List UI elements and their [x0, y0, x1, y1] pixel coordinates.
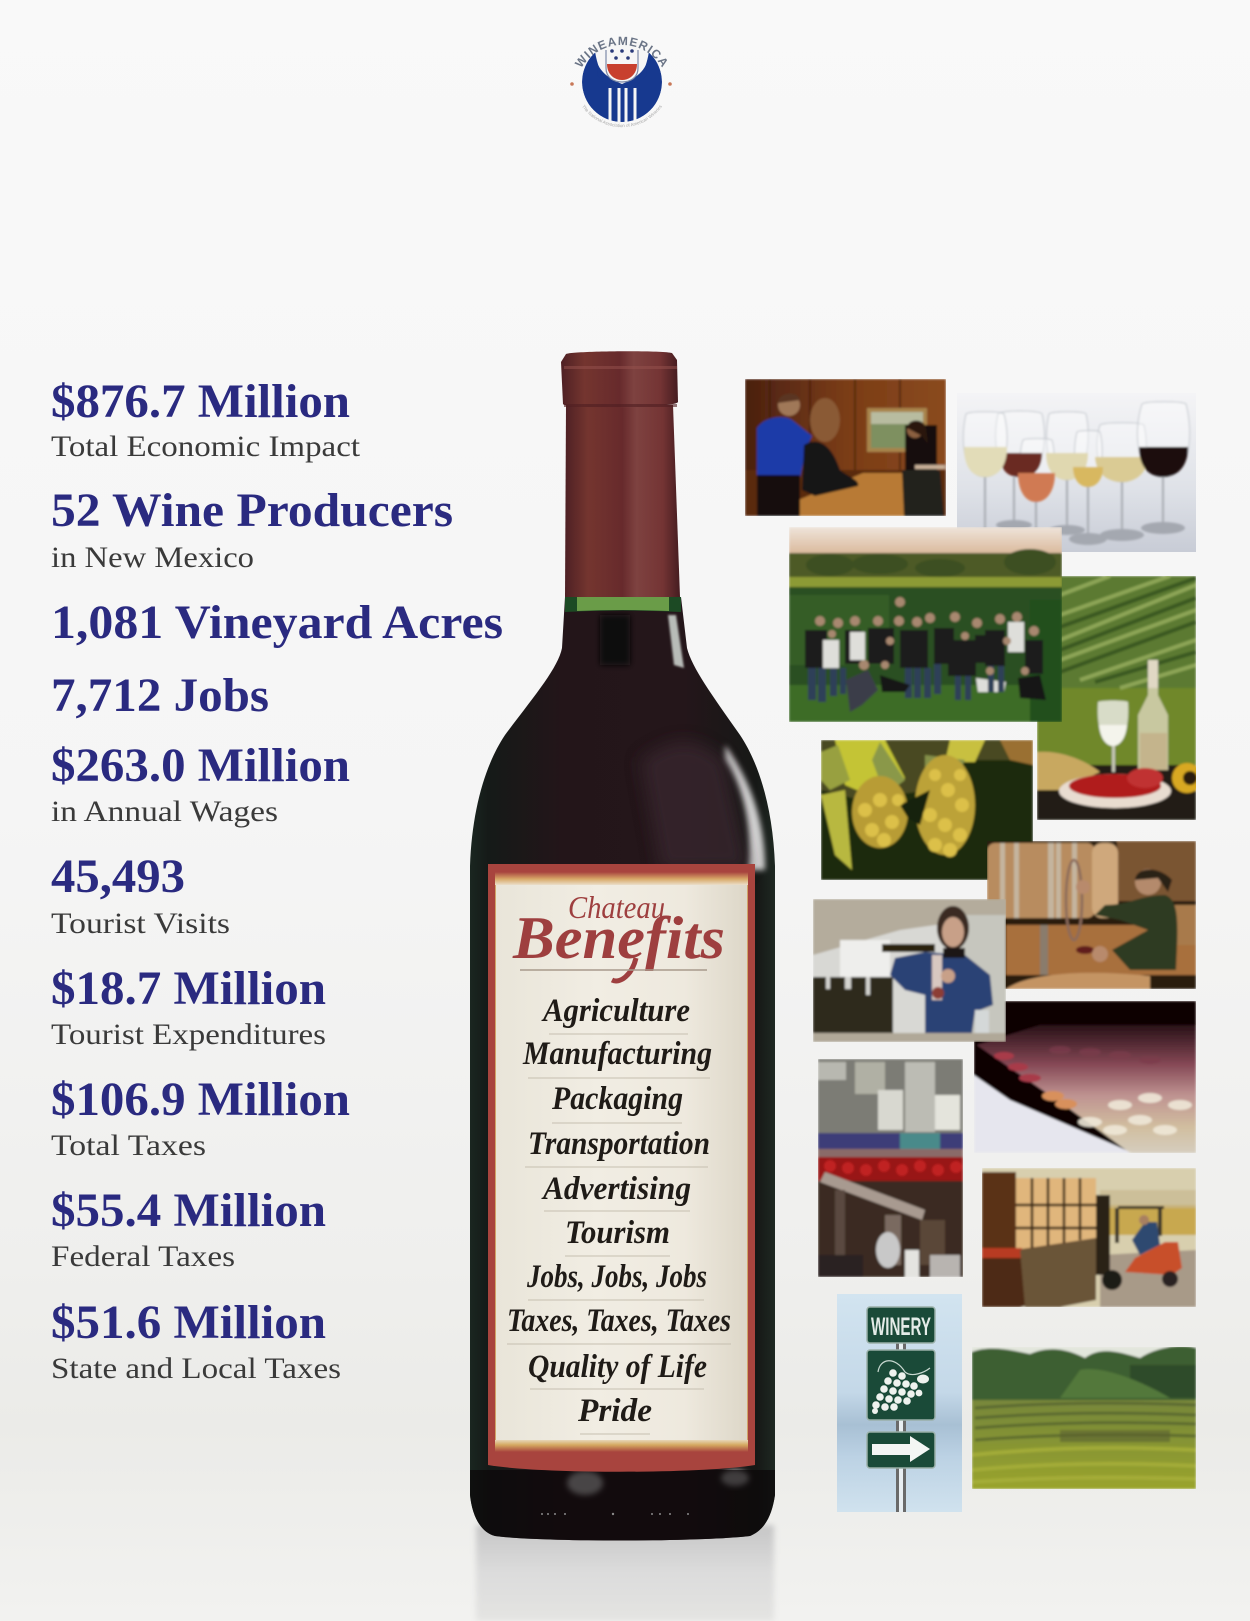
label title: Chateau Benefits: Chateau — [568, 889, 665, 925]
label list of benefits: Transportation — [528, 1126, 710, 1162]
photo: vineyard rows and tree line — [972, 1346, 1196, 1489]
people — [805, 597, 1046, 712]
photo: wine glasses on tasting table — [974, 1001, 1196, 1153]
photo: bottling line — [818, 1059, 963, 1277]
burgundy foil capsule — [561, 351, 680, 597]
bottle label — [488, 864, 755, 1472]
photo: golden grape cluster — [821, 740, 1033, 880]
photo: woman pouring wine — [813, 899, 1006, 1042]
label list of benefits — [507, 993, 731, 1434]
sign: direction arrow — [867, 1432, 935, 1468]
stat: annual wages: in Annual Wages — [51, 795, 278, 828]
label list of benefits: Taxes, Taxes, Taxes — [507, 1303, 731, 1339]
wine bottle — [470, 351, 775, 1545]
sign: grape cluster — [867, 1350, 935, 1420]
photo: row of wine glasses — [957, 393, 1196, 552]
stat: federal taxes: $55.4 Million — [51, 1184, 326, 1237]
stat list — [51, 375, 503, 1385]
label list of benefits: Jobs, Jobs, Jobs — [526, 1259, 707, 1295]
stat: tourist visits: 45,493 — [51, 850, 185, 903]
photo: forklift and grape bins — [982, 1168, 1196, 1307]
label list of benefits: Pride — [577, 1393, 652, 1429]
stat: wine producers — [51, 484, 453, 574]
bottle glass body — [470, 597, 775, 1545]
logo: WineAmerica seal: WINEAMERICA — [574, 36, 667, 68]
photo: winemaker among oak barrels — [987, 841, 1196, 989]
stat: tourist expenditures: $18.7 Million — [51, 962, 326, 1015]
photo: winery family group in vineyard — [789, 527, 1062, 722]
stat: state and local taxes: State and Local Taxes — [51, 1352, 341, 1385]
logo: WineAmerica seal — [570, 36, 672, 128]
stat: total taxes — [51, 1073, 350, 1162]
stat: state and local taxes: $51.6 Million — [51, 1296, 326, 1349]
stat: total economic impact — [51, 375, 361, 463]
stat: tourist expenditures: Tourist Expenditures — [51, 1018, 326, 1051]
stat: tourist visits: Tourist Visits — [51, 907, 230, 940]
stat: federal taxes: Federal Taxes — [51, 1240, 235, 1273]
label title: Chateau Benefits: Benefits — [512, 905, 725, 971]
label list of benefits: Packaging — [551, 1081, 683, 1117]
sign pole — [896, 1340, 906, 1512]
label list of benefits: Agriculture — [541, 993, 690, 1029]
label list of benefits: Advertising — [541, 1171, 691, 1207]
label title: Chateau Benefits — [512, 889, 725, 981]
stat: state and local taxes — [51, 1296, 341, 1385]
stat: jobs: 7,712 Jobs — [51, 669, 269, 722]
sign: WINERY — [867, 1307, 935, 1343]
stat: tourist expenditures — [51, 962, 326, 1051]
stat: total economic impact: $876.7 Million — [51, 375, 350, 428]
sign: WINERY: WINERY — [871, 1313, 931, 1341]
photo: winery road sign — [837, 1294, 962, 1512]
label list of benefits: Manufacturing — [522, 1036, 712, 1072]
stat: wine producers: 52 Wine Producers — [51, 484, 453, 537]
stat: total economic impact: Total Economic Impact — [51, 430, 361, 463]
label list of benefits: Quality of Life — [528, 1349, 707, 1385]
stat: total taxes: Total Taxes — [51, 1129, 206, 1162]
stat: annual wages: $263.0 Million — [51, 739, 350, 792]
stat: total taxes: $106.9 Million — [51, 1073, 350, 1126]
photo collage — [745, 379, 1202, 1512]
stat: tourist visits — [51, 850, 230, 940]
stat: federal taxes — [51, 1184, 326, 1273]
stat: vineyard acres: 1,081 Vineyard Acres — [51, 596, 503, 649]
stat: annual wages — [51, 739, 350, 828]
bottle reflection on table — [476, 1525, 774, 1621]
green neck band — [565, 596, 681, 612]
logo: WineAmerica seal: The National Association of American Wineries — [582, 104, 662, 128]
photo: vineyard with wine, bottle and lobster — [1037, 576, 1202, 820]
stat: wine producers: in New Mexico — [51, 541, 254, 574]
photo: tasting room — [745, 379, 946, 516]
label list of benefits: Tourism — [565, 1215, 670, 1251]
